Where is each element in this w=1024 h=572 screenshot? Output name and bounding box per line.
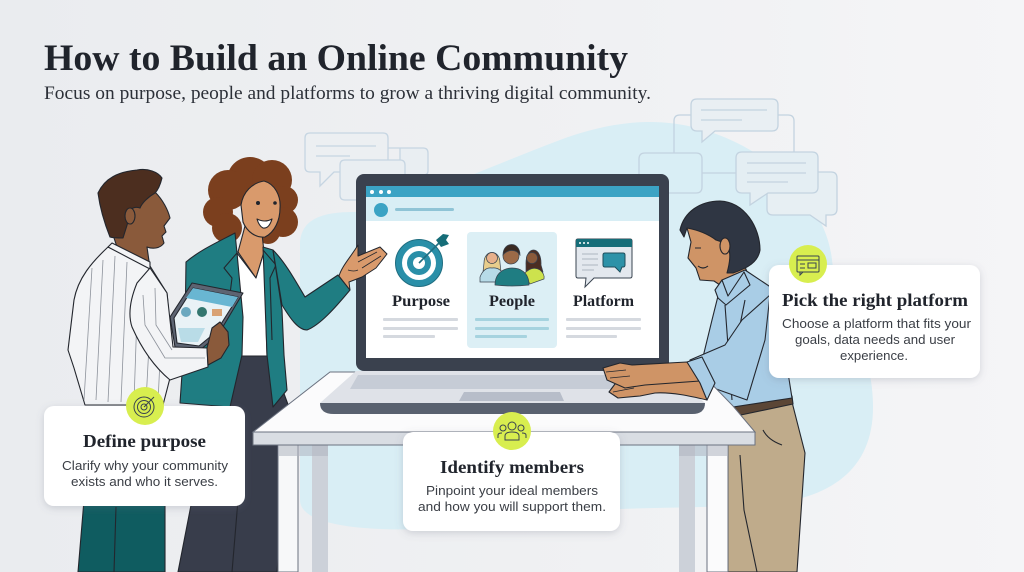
woman jacket: [180, 233, 287, 407]
description: Pinpoint your ideal members: [426, 483, 599, 498]
man trousers: [78, 500, 165, 572]
placeholder text lines: [383, 318, 641, 338]
browser header: [366, 186, 659, 197]
background blob: [300, 122, 873, 529]
person: man with tablet: [68, 169, 243, 572]
card: Identify members: [403, 412, 620, 531]
chat bubbles right: [639, 99, 837, 226]
screen: [366, 186, 659, 358]
shirt: [703, 270, 792, 407]
neck and face: [687, 215, 750, 295]
label: Platform: Platform: [573, 293, 634, 310]
chat bubbles left: [305, 133, 428, 200]
person: woman at laptop, arms and hands: [603, 357, 715, 400]
lower arm: [609, 380, 707, 400]
card: Define purpose: [44, 387, 245, 506]
person: woman at laptop, body: [680, 201, 805, 572]
card: Pick the right platform: [769, 245, 980, 378]
eye and smile: [695, 248, 708, 268]
woman white top: [237, 252, 267, 356]
upper arm: [603, 362, 700, 388]
icon: target: [396, 234, 449, 286]
man ear: [125, 208, 135, 224]
man hand: [207, 322, 229, 365]
woman neck: [238, 226, 264, 278]
label: People: People: [489, 293, 535, 310]
heading: Identify members: [440, 457, 584, 477]
table: [253, 372, 755, 572]
heading: Pick the right platform: [782, 290, 968, 310]
leg shadows: [278, 445, 728, 456]
description: [418, 483, 606, 514]
description: and how you will support them.: [418, 499, 606, 514]
trackpad: [459, 392, 564, 401]
laptop screen frame: [356, 174, 669, 371]
trousers: [728, 402, 805, 572]
table front edge: [253, 432, 755, 445]
description: goals, data needs and user: [795, 332, 956, 347]
laptop base: [320, 371, 705, 414]
finger lines: [606, 370, 634, 392]
person: woman presenting: [178, 157, 350, 572]
heading: Define purpose: [83, 431, 206, 451]
tablet: [170, 283, 243, 350]
woman hair: [203, 157, 298, 244]
laptop: [320, 174, 705, 414]
description: experience.: [840, 348, 908, 363]
woman arm: [273, 250, 350, 330]
man collar: [108, 243, 150, 269]
ear: [720, 238, 730, 254]
woman lapels: [224, 250, 276, 340]
shirt cuff: [687, 357, 715, 400]
man sleeve: [130, 268, 208, 380]
description: Choose a platform that fits your: [782, 316, 972, 331]
woman presenting: open hand: [339, 245, 387, 290]
belt: [733, 396, 793, 416]
woman face: [241, 181, 280, 237]
description: exists and who it serves.: [71, 474, 218, 489]
title: How to Build an Online Community: [44, 38, 628, 79]
description: Clarify why your community: [62, 458, 229, 473]
badge: group: [493, 412, 531, 450]
man hair: [98, 169, 162, 238]
description: [782, 316, 972, 363]
man shirt: [68, 247, 172, 405]
people highlight panel: [467, 232, 557, 348]
table legs: [278, 445, 298, 572]
sleeve: [690, 295, 770, 400]
subtitle: Focus on purpose, people and platforms to grow a thriving digital community.: [44, 84, 651, 104]
woman eyes and smile: [256, 201, 277, 228]
hair: [680, 201, 760, 273]
icon: people: [480, 244, 544, 286]
badge: target: [126, 387, 164, 425]
badge: platform: [789, 245, 827, 283]
keyboard: [350, 375, 680, 389]
man neck and face: [112, 190, 170, 268]
man shirt stripes: [84, 256, 160, 402]
icon: platform window: [576, 239, 632, 287]
table top: [253, 372, 755, 432]
woman trousers: [178, 350, 290, 572]
label: Purpose: Purpose: [392, 293, 450, 310]
description: [62, 458, 229, 489]
